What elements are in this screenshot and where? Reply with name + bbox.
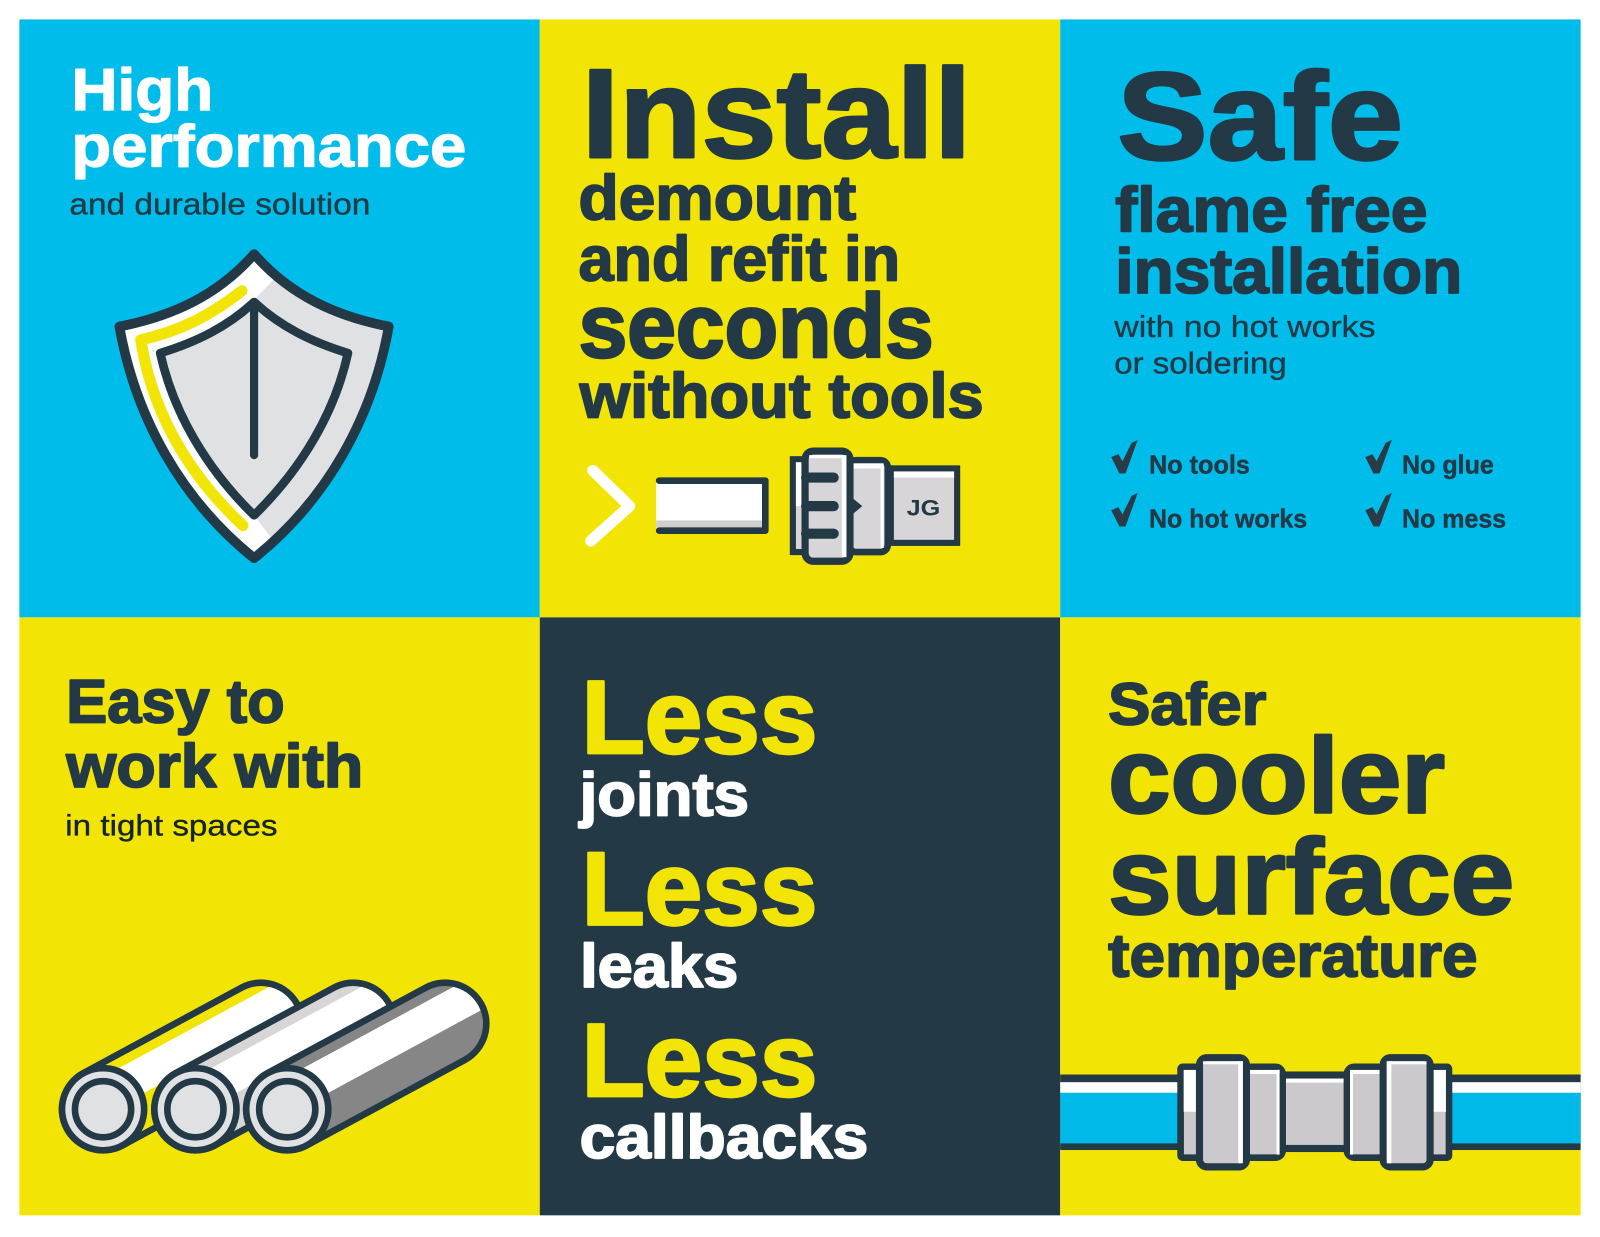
item: no tools	[1111, 440, 1250, 480]
panel: install	[540, 19, 1060, 617]
pipe: left	[58, 979, 300, 1154]
item: no mess: No mess	[1402, 506, 1506, 534]
heading: easy to work with: work with	[65, 732, 363, 800]
text: less joints	[579, 660, 817, 828]
icon: push-fit connector	[793, 451, 957, 561]
item: no hot works: No hot works	[1149, 506, 1307, 534]
panel: safe	[1060, 19, 1581, 617]
icon: chevron arrow	[591, 470, 630, 541]
heading: safer cooler surface temperature: surface	[1108, 816, 1514, 936]
text: demount and refit in seconds without tools: seconds	[579, 277, 934, 377]
text: with no hot works or soldering	[1113, 310, 1376, 381]
heading: install: Install	[582, 42, 971, 184]
text: demount and refit in seconds without tools: without tools	[579, 361, 984, 431]
heading: safer cooler surface temperature: Safer	[1108, 671, 1266, 738]
heading: high performance: High	[71, 56, 213, 123]
heading: high performance: performance	[71, 112, 466, 179]
panel: easy to work with	[19, 617, 540, 1215]
item: no tools: No tools	[1149, 452, 1250, 480]
icon: push-fit connector: JG	[907, 495, 940, 520]
text: in tight spaces: in tight spaces	[65, 810, 278, 843]
text: demount and refit in seconds without tools	[579, 163, 984, 431]
heading: easy to work with: Easy to	[66, 667, 285, 735]
text: flame free installation: installation	[1115, 237, 1462, 307]
heading: safer cooler surface temperature: cooler	[1108, 715, 1445, 835]
heading: safe: Safe	[1117, 47, 1403, 186]
item: no mess	[1365, 493, 1506, 534]
text: less callbacks: Less	[582, 1003, 817, 1119]
panel: safer cooler surface	[1060, 617, 1581, 1215]
icon: pipe section	[656, 481, 765, 531]
heading: safer cooler surface temperature: temperature	[1108, 922, 1478, 990]
panel: less	[540, 617, 1060, 1215]
text: less callbacks	[580, 1003, 868, 1171]
text: less joints: Less	[582, 660, 817, 776]
icon: pipe with connector	[1060, 1058, 1581, 1167]
text: less leaks: leaks	[580, 932, 738, 1000]
pipe: right	[242, 979, 490, 1154]
text: demount and refit in seconds without tools: demount	[579, 163, 856, 233]
text: less callbacks: callbacks	[580, 1103, 868, 1171]
text: less leaks	[580, 832, 817, 1000]
panel: high performance	[19, 19, 540, 617]
item: no glue	[1365, 440, 1494, 480]
text: and durable solution: and durable solution	[69, 187, 370, 221]
item: no glue: No glue	[1402, 452, 1494, 480]
heading: safer cooler surface temperature	[1108, 671, 1514, 990]
text: demount and refit in seconds without tools: and refit in	[579, 225, 900, 295]
text: with no hot works or soldering: or soldering	[1114, 347, 1287, 381]
pipe: middle	[151, 979, 392, 1154]
item: no hot works	[1111, 493, 1307, 534]
text: flame free installation	[1115, 176, 1462, 307]
heading: easy to work with	[65, 667, 363, 800]
text: flame free installation: flame free	[1115, 176, 1428, 246]
icon: shield	[102, 245, 389, 571]
text: less leaks: Less	[582, 832, 817, 948]
icon: three pipes	[58, 979, 490, 1154]
checklist	[1111, 440, 1506, 534]
text: with no hot works or soldering: with no hot works	[1113, 310, 1376, 344]
text: less joints: joints	[579, 760, 749, 828]
heading: high performance	[71, 56, 466, 179]
